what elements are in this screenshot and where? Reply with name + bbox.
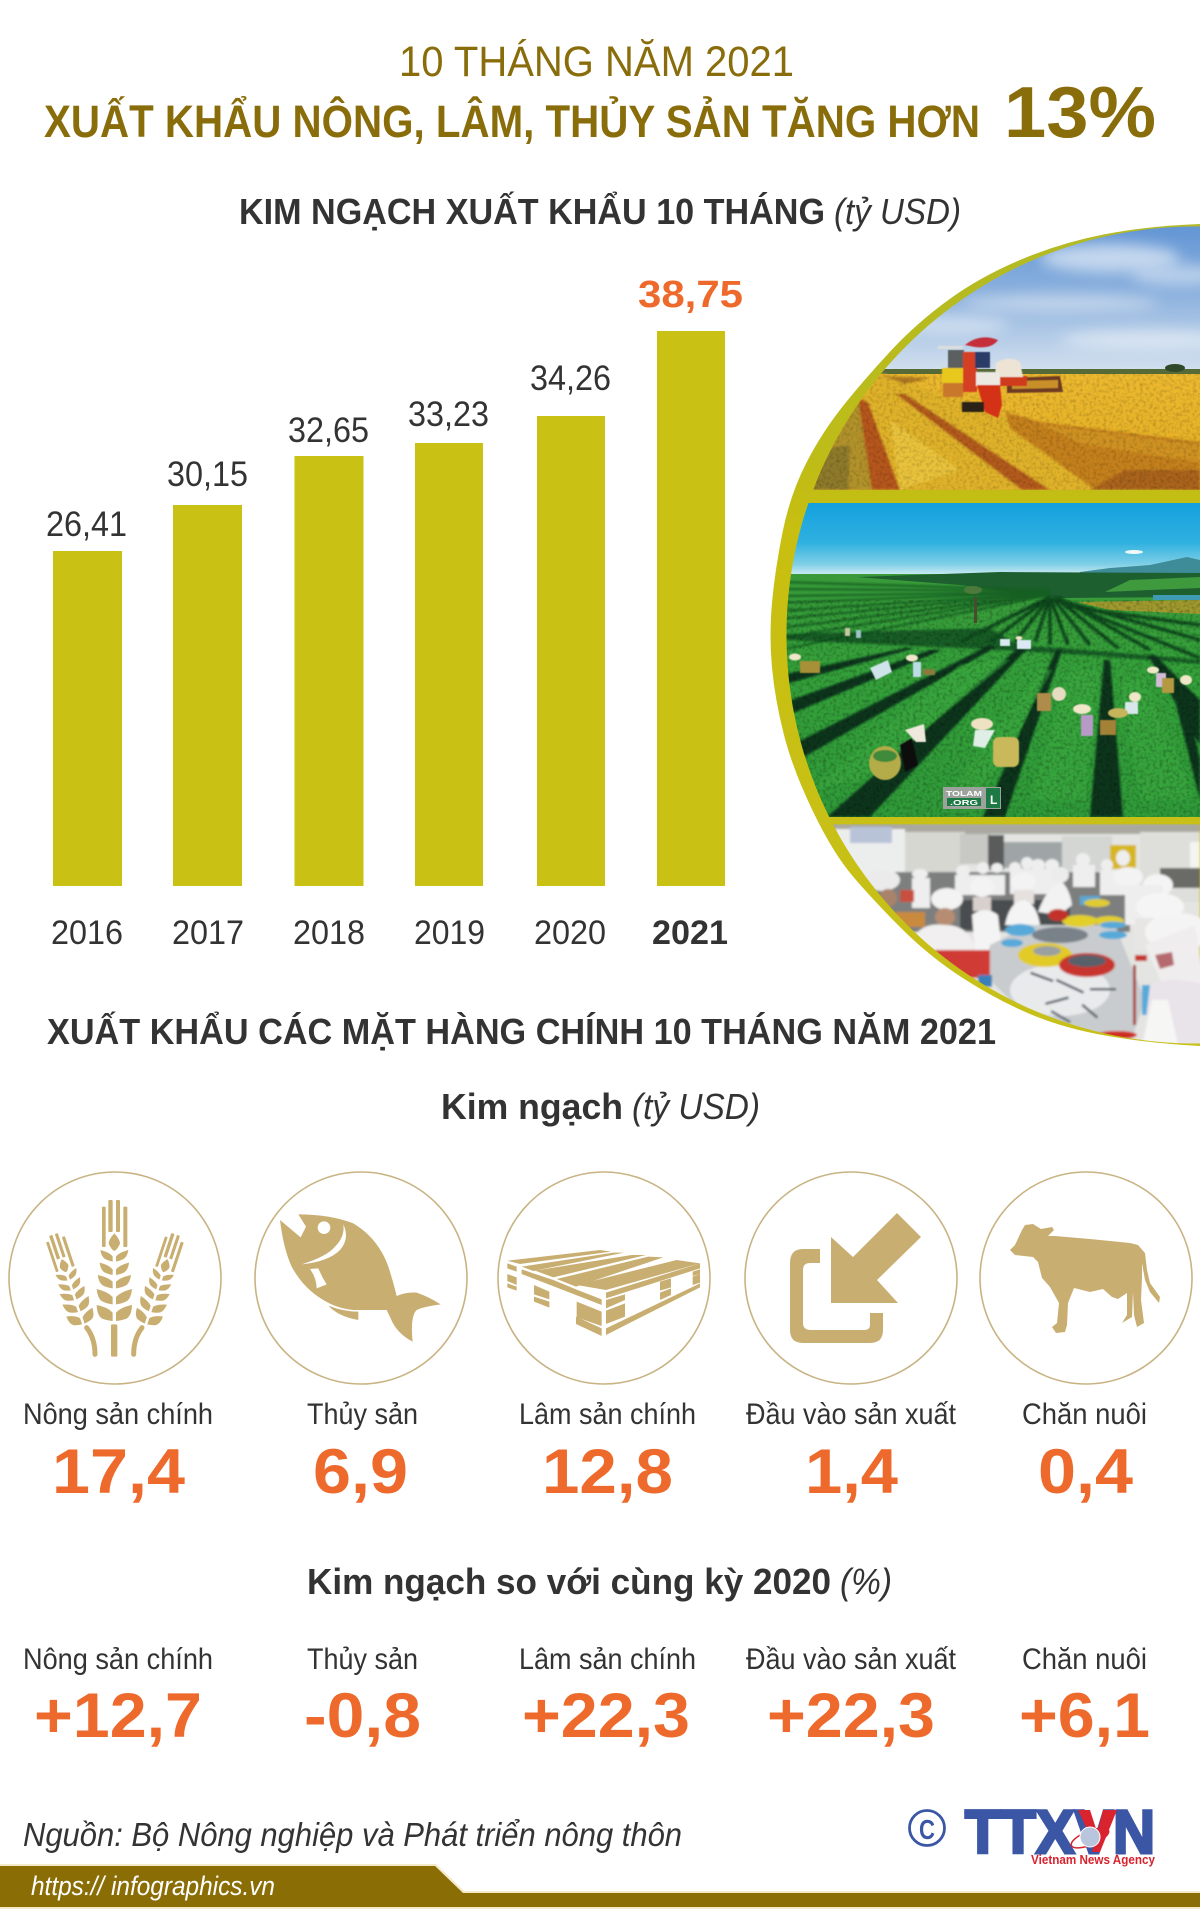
bar 2020: 2020: [534, 914, 606, 952]
bar 2020: 34,26: [530, 359, 611, 398]
photo: rice harvest: [813, 226, 1200, 490]
labels row 2: Thủy sản: [307, 1643, 418, 1676]
labels row 1: Lâm sản chính: [519, 1398, 696, 1431]
footer band with url: [0, 1864, 1200, 1909]
labels row 2: Đầu vào sản xuất: [746, 1643, 957, 1676]
bar 2016: 26,41: [46, 505, 127, 544]
bar 2019: 33,23: [408, 395, 489, 434]
bar 2019: 2019: [414, 914, 485, 952]
heading: main export goods: XUẤT KHẨU CÁC MẶT HÀNG CHÍNH 10 THÁNG NĂM 2021: [47, 1010, 996, 1052]
values row 2: +22,3: [767, 1681, 935, 1751]
icon: wheat in circle: [9, 1172, 221, 1384]
subheading: change versus 2020: Kim ngạch so với cùng kỳ 2020: [307, 1561, 831, 1602]
bar 2018: 2018: [293, 914, 365, 952]
photo source badge: TOLAM: [946, 791, 982, 798]
photo collage disc: [770, 220, 1200, 1050]
icon: inward arrow in circle: [745, 1172, 957, 1384]
subheading: value: [441, 1086, 760, 1127]
title line 1: 10 THÁNG NĂM 2021: [399, 38, 794, 86]
photo source badge: .ORG: [950, 800, 979, 807]
logo: copyright and TTXVN: C: [919, 1814, 935, 1845]
values row 1: 6,9: [313, 1437, 408, 1507]
values row 1: 12,8: [542, 1437, 673, 1507]
dark furrows: [786, 645, 1200, 817]
icon: wooden pallet in circle: [498, 1172, 710, 1384]
labels row 1: [23, 1398, 1147, 1431]
converging rows near the vanishing point: [960, 597, 1200, 658]
bar 2016: 2016: [51, 914, 123, 952]
bar 2017: 30,15: [167, 455, 248, 494]
bar 2021 highlighted: 2021: [652, 914, 728, 952]
photo: seafood processing factory: [833, 824, 1200, 1044]
bar chart: export value by year: [46, 274, 743, 952]
bar 2016: [46, 505, 127, 952]
footer band with url: https:// infographics.vn: [31, 1871, 275, 1901]
values row 1: [52, 1437, 1133, 1507]
bar 2019: [408, 395, 489, 952]
bar 2021 highlighted: 38,75: [638, 274, 743, 316]
headline figure 13%: 13%: [1004, 73, 1156, 153]
subheading: change versus 2020: (%): [840, 1561, 892, 1602]
labels row 1: Nông sản chính: [23, 1398, 213, 1431]
bar 2018: [288, 411, 369, 952]
icon: cow in circle: [980, 1172, 1192, 1384]
labels row 1: Đầu vào sản xuất: [746, 1398, 957, 1431]
center worker group: [1005, 867, 1072, 925]
labels row 2: [23, 1643, 1147, 1676]
values row 1: 0,4: [1038, 1437, 1133, 1507]
values row 2: -0,8: [304, 1681, 421, 1751]
logo: copyright and TTXVN: TTXVN: [965, 1798, 1155, 1866]
far crowd: [912, 850, 1130, 908]
heading: export value chart: KIM NGẠCH XUẤT KHẨU 10 THÁNG: [239, 190, 825, 232]
labels row 2: Chăn nuôi: [1022, 1643, 1147, 1676]
table, baskets and fish: [935, 899, 1151, 1044]
bar 2018: 32,65: [288, 411, 369, 450]
source note: Nguồn: Bộ Nông nghiệp và Phát triển nông thôn: [23, 1816, 682, 1853]
foreground worker: [1143, 913, 1200, 1050]
bar 2017: [167, 455, 248, 952]
icon: fish in circle: [255, 1172, 467, 1384]
title line 2: XUẤT KHẨU NÔNG, LÂM, THỦY SẢN TĂNG HƠN: [44, 96, 980, 147]
labels row 2: Nông sản chính: [23, 1643, 213, 1676]
heading: export value chart: (tỷ USD): [834, 191, 961, 232]
bar 2017: 2017: [172, 914, 244, 952]
upper left rows: [780, 582, 1050, 650]
values row 1: 17,4: [52, 1437, 185, 1507]
left worker group: [864, 869, 1002, 952]
labels row 2: Lâm sản chính: [519, 1643, 696, 1676]
logo: copyright and TTXVN: Vietnam News Agency: [1031, 1852, 1156, 1867]
right worker group: [1078, 865, 1184, 926]
subheading: value: (tỷ USD): [632, 1086, 760, 1127]
title block: [44, 38, 1156, 153]
photo: tea plantation: [770, 503, 1200, 817]
bar 2020: [530, 359, 611, 952]
values row 2: +22,3: [522, 1681, 690, 1751]
photo source badge: L: [990, 793, 997, 807]
labels row 1: Chăn nuôi: [1022, 1398, 1147, 1431]
values row 2: [34, 1681, 1150, 1751]
subheading: value: Kim ngạch: [441, 1086, 623, 1127]
labels row 1: Thủy sản: [307, 1398, 418, 1431]
pickers and baskets: [789, 628, 1192, 780]
harvester: [938, 337, 1063, 418]
values row 1: 1,4: [805, 1437, 898, 1507]
lime crescent backing: [770, 224, 1200, 1046]
photo source badge: [943, 787, 1001, 809]
values row 2: +12,7: [34, 1681, 202, 1751]
values row 2: +6,1: [1019, 1681, 1150, 1751]
bar 2021 highlighted: [638, 274, 743, 952]
